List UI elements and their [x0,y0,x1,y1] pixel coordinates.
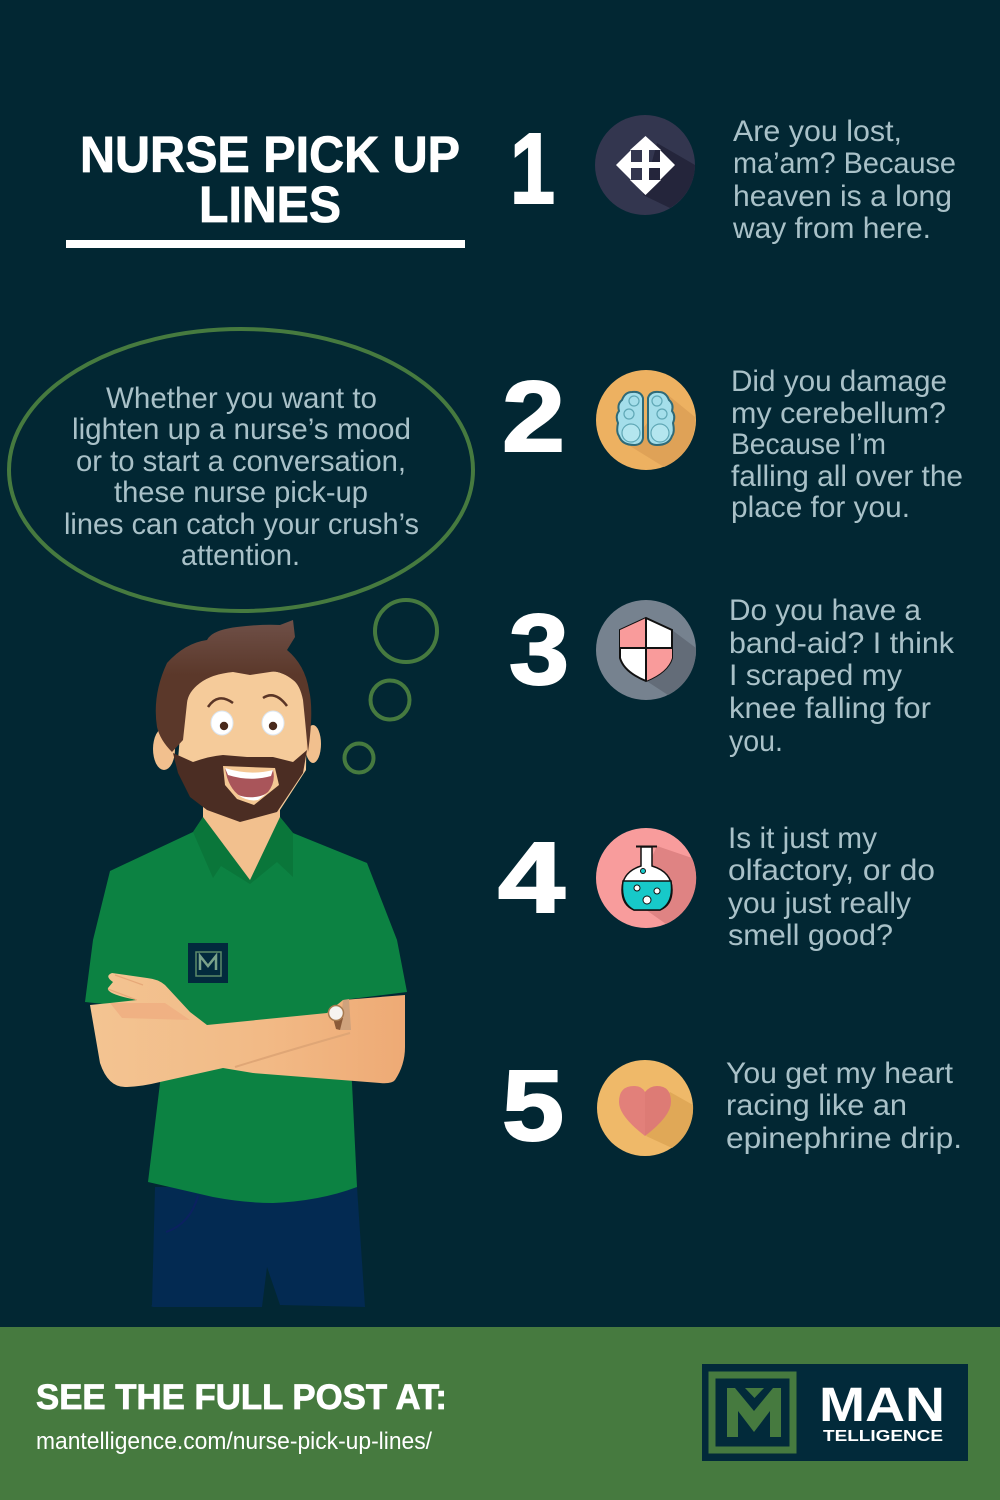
title [66,126,465,248]
item 4 [498,822,935,952]
thought bubble text: lighten up a nurse’s mood [72,413,411,446]
ears [153,728,175,770]
icon: shield [596,600,696,700]
number 3: 3 [509,594,569,706]
hair [156,620,311,752]
text 2: my cerebellum? [731,397,946,430]
item 5 [502,1050,962,1162]
mouth [223,766,279,805]
text 1: heaven is a long [733,180,952,213]
text 2: place for you. [731,491,910,524]
text 3: Do you have a [729,594,921,627]
number 1: 1 [510,113,555,225]
shirt badge [188,943,228,983]
text 1: Are you lost, [733,115,902,148]
collar [193,817,293,884]
text 2: falling all over the [731,460,963,493]
text 1: way from here. [732,212,931,245]
trousers [151,1187,365,1307]
item 2 [502,361,963,524]
text 3: you. [729,725,783,758]
text 5: You get my heart [726,1057,954,1090]
character: bearded man with crossed arms [85,620,407,1307]
thought bubble text: these nurse pick-up [114,476,368,509]
icon: flask [596,828,696,928]
footer heading: SEE THE FULL POST AT: [36,1378,447,1417]
number 5: 5 [502,1050,564,1162]
number 2: 2 [502,361,565,473]
thought bubble text: attention. [181,539,300,572]
text 4: olfactory, or do [728,854,935,887]
neck [203,805,280,880]
text 4: Is it just my [728,822,877,855]
shirt [85,817,407,1203]
footer band [0,1327,1000,1500]
face [178,668,307,810]
text 3: I scraped my [729,659,902,692]
text 4: you just really [728,887,911,920]
logo [702,1364,968,1461]
item 1 [510,113,956,245]
text 2: Because I’m [731,428,886,461]
logo: TELLIGENCE [823,1428,943,1445]
text 2: Did you damage [731,365,947,398]
footer url: mantelligence.com/nurse-pick-up-lines/ [36,1428,432,1455]
text 5 [726,1057,962,1155]
eyes [208,695,287,735]
text 3: band-aid? I think [729,627,955,660]
text 5: epinephrine drip. [726,1122,962,1155]
text 4 [728,822,935,952]
text 1: ma’am? Because [733,147,956,180]
text 3 [729,594,955,758]
thought bubble text: Whether you want to [106,382,377,415]
title: NURSE PICK UP [80,126,460,183]
icon: heart [597,1060,693,1156]
number 4: 4 [498,822,565,934]
item 3 [509,594,955,758]
thought bubble text: lines can catch your crush’s [64,508,419,541]
wristwatch [328,1006,344,1030]
text 5: racing like an [726,1089,907,1122]
text 1 [732,115,956,245]
icon: move arrows [595,115,695,215]
logo: MAN [819,1379,945,1432]
beard [173,750,307,822]
crossed arms [90,973,405,1087]
thought bubble [9,329,473,772]
text 2 [731,365,963,524]
icon: brain [596,370,696,470]
title: LINES [199,176,341,233]
thought bubble text: or to start a conversation, [76,445,406,478]
text 3: knee falling for [729,692,931,725]
thought bubble text [64,382,419,572]
text 4: smell good? [728,919,893,952]
